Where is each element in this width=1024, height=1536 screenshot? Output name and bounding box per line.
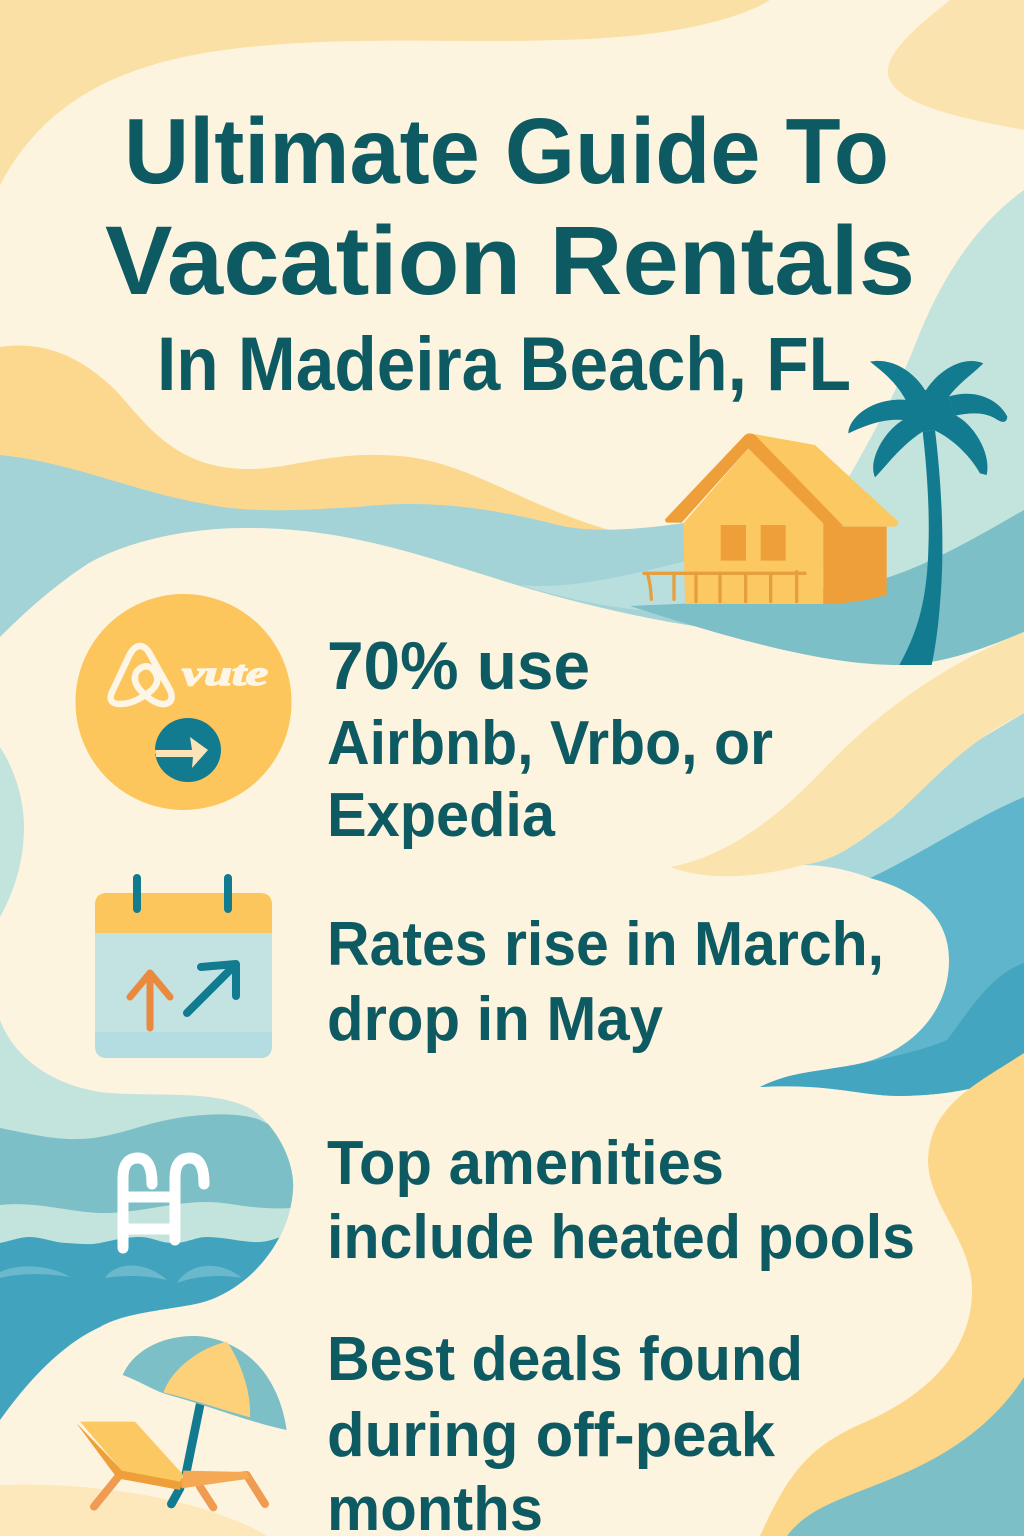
text: amenities: include heated pools [327, 1203, 915, 1272]
logo: arrow disk [154, 718, 221, 782]
icon: beach umbrella and lounger [76, 1336, 287, 1507]
text: rates: Rates rise in March, [327, 910, 884, 979]
light teal streak right [803, 713, 1024, 878]
pale tail of teal band [520, 560, 690, 612]
title line 3: In Madeira Beach, FL [157, 322, 851, 407]
top-right sand blob [888, 0, 1024, 130]
left light teal arc [0, 747, 24, 917]
logo: wordmark: vute [182, 654, 268, 693]
text: rates: drop in May [327, 985, 663, 1054]
mid teal hill under house [630, 510, 1024, 665]
light teal hill top right [780, 190, 1024, 600]
calendar rings [137, 878, 228, 909]
darker teal wave right [760, 963, 1024, 1096]
umbrella canopy [123, 1336, 287, 1430]
lounger back [80, 1422, 183, 1482]
logo: rental mark [111, 646, 172, 704]
text: amenities: Top amenities [327, 1129, 724, 1198]
roof right [750, 433, 898, 527]
water panel with layered waves [0, 1020, 294, 1420]
pale sand streak right [670, 632, 1024, 876]
roof fascia [665, 433, 843, 526]
umbrella panel [163, 1342, 250, 1417]
lounger back edge [76, 1423, 183, 1490]
middle sand wave [0, 346, 616, 532]
teal corner bottom right [770, 1360, 1024, 1536]
text: rates [327, 910, 884, 1054]
lounger legs and frame [94, 1475, 265, 1507]
icon: pool ladder [123, 1158, 204, 1248]
icon: calendar with arrows [95, 878, 272, 1058]
icon: booking platforms badge [76, 594, 292, 810]
sand wave bottom right [760, 1053, 1024, 1536]
bottom-left sand patch [0, 1485, 267, 1536]
arrow: orange up [130, 973, 170, 1028]
side wall [823, 518, 887, 604]
illustration: beach house [644, 433, 898, 604]
text: best deals: during off-peak [327, 1401, 776, 1470]
top-left sand wave [0, 0, 770, 185]
teal wave band [0, 455, 700, 637]
illustration: palm tree [848, 361, 1007, 665]
text: platforms stat: 70% use [327, 628, 590, 704]
text: platforms stat [327, 628, 773, 850]
umbrella pole [171, 1405, 200, 1504]
windows [721, 525, 786, 561]
arrow: teal diagonal [187, 964, 236, 1013]
text: amenities [327, 1129, 915, 1272]
text: best deals: Best deals found [327, 1325, 803, 1394]
text: best deals [327, 1325, 803, 1536]
lounger seat [182, 1471, 250, 1488]
calendar header [95, 893, 272, 933]
front wall [683, 448, 823, 604]
porch railing [644, 572, 805, 602]
deep teal wave right [760, 797, 1024, 1096]
calendar lower tint [95, 1032, 272, 1058]
title [105, 99, 915, 407]
text: platforms stat: Airbnb, Vrbo, or [327, 709, 773, 778]
title line 2: Vacation Rentals [105, 206, 915, 315]
calendar body [95, 893, 272, 1058]
title line 1: Ultimate Guide To [124, 99, 889, 203]
badge circle [76, 594, 292, 810]
text: platforms stat: Expedia [327, 781, 555, 850]
